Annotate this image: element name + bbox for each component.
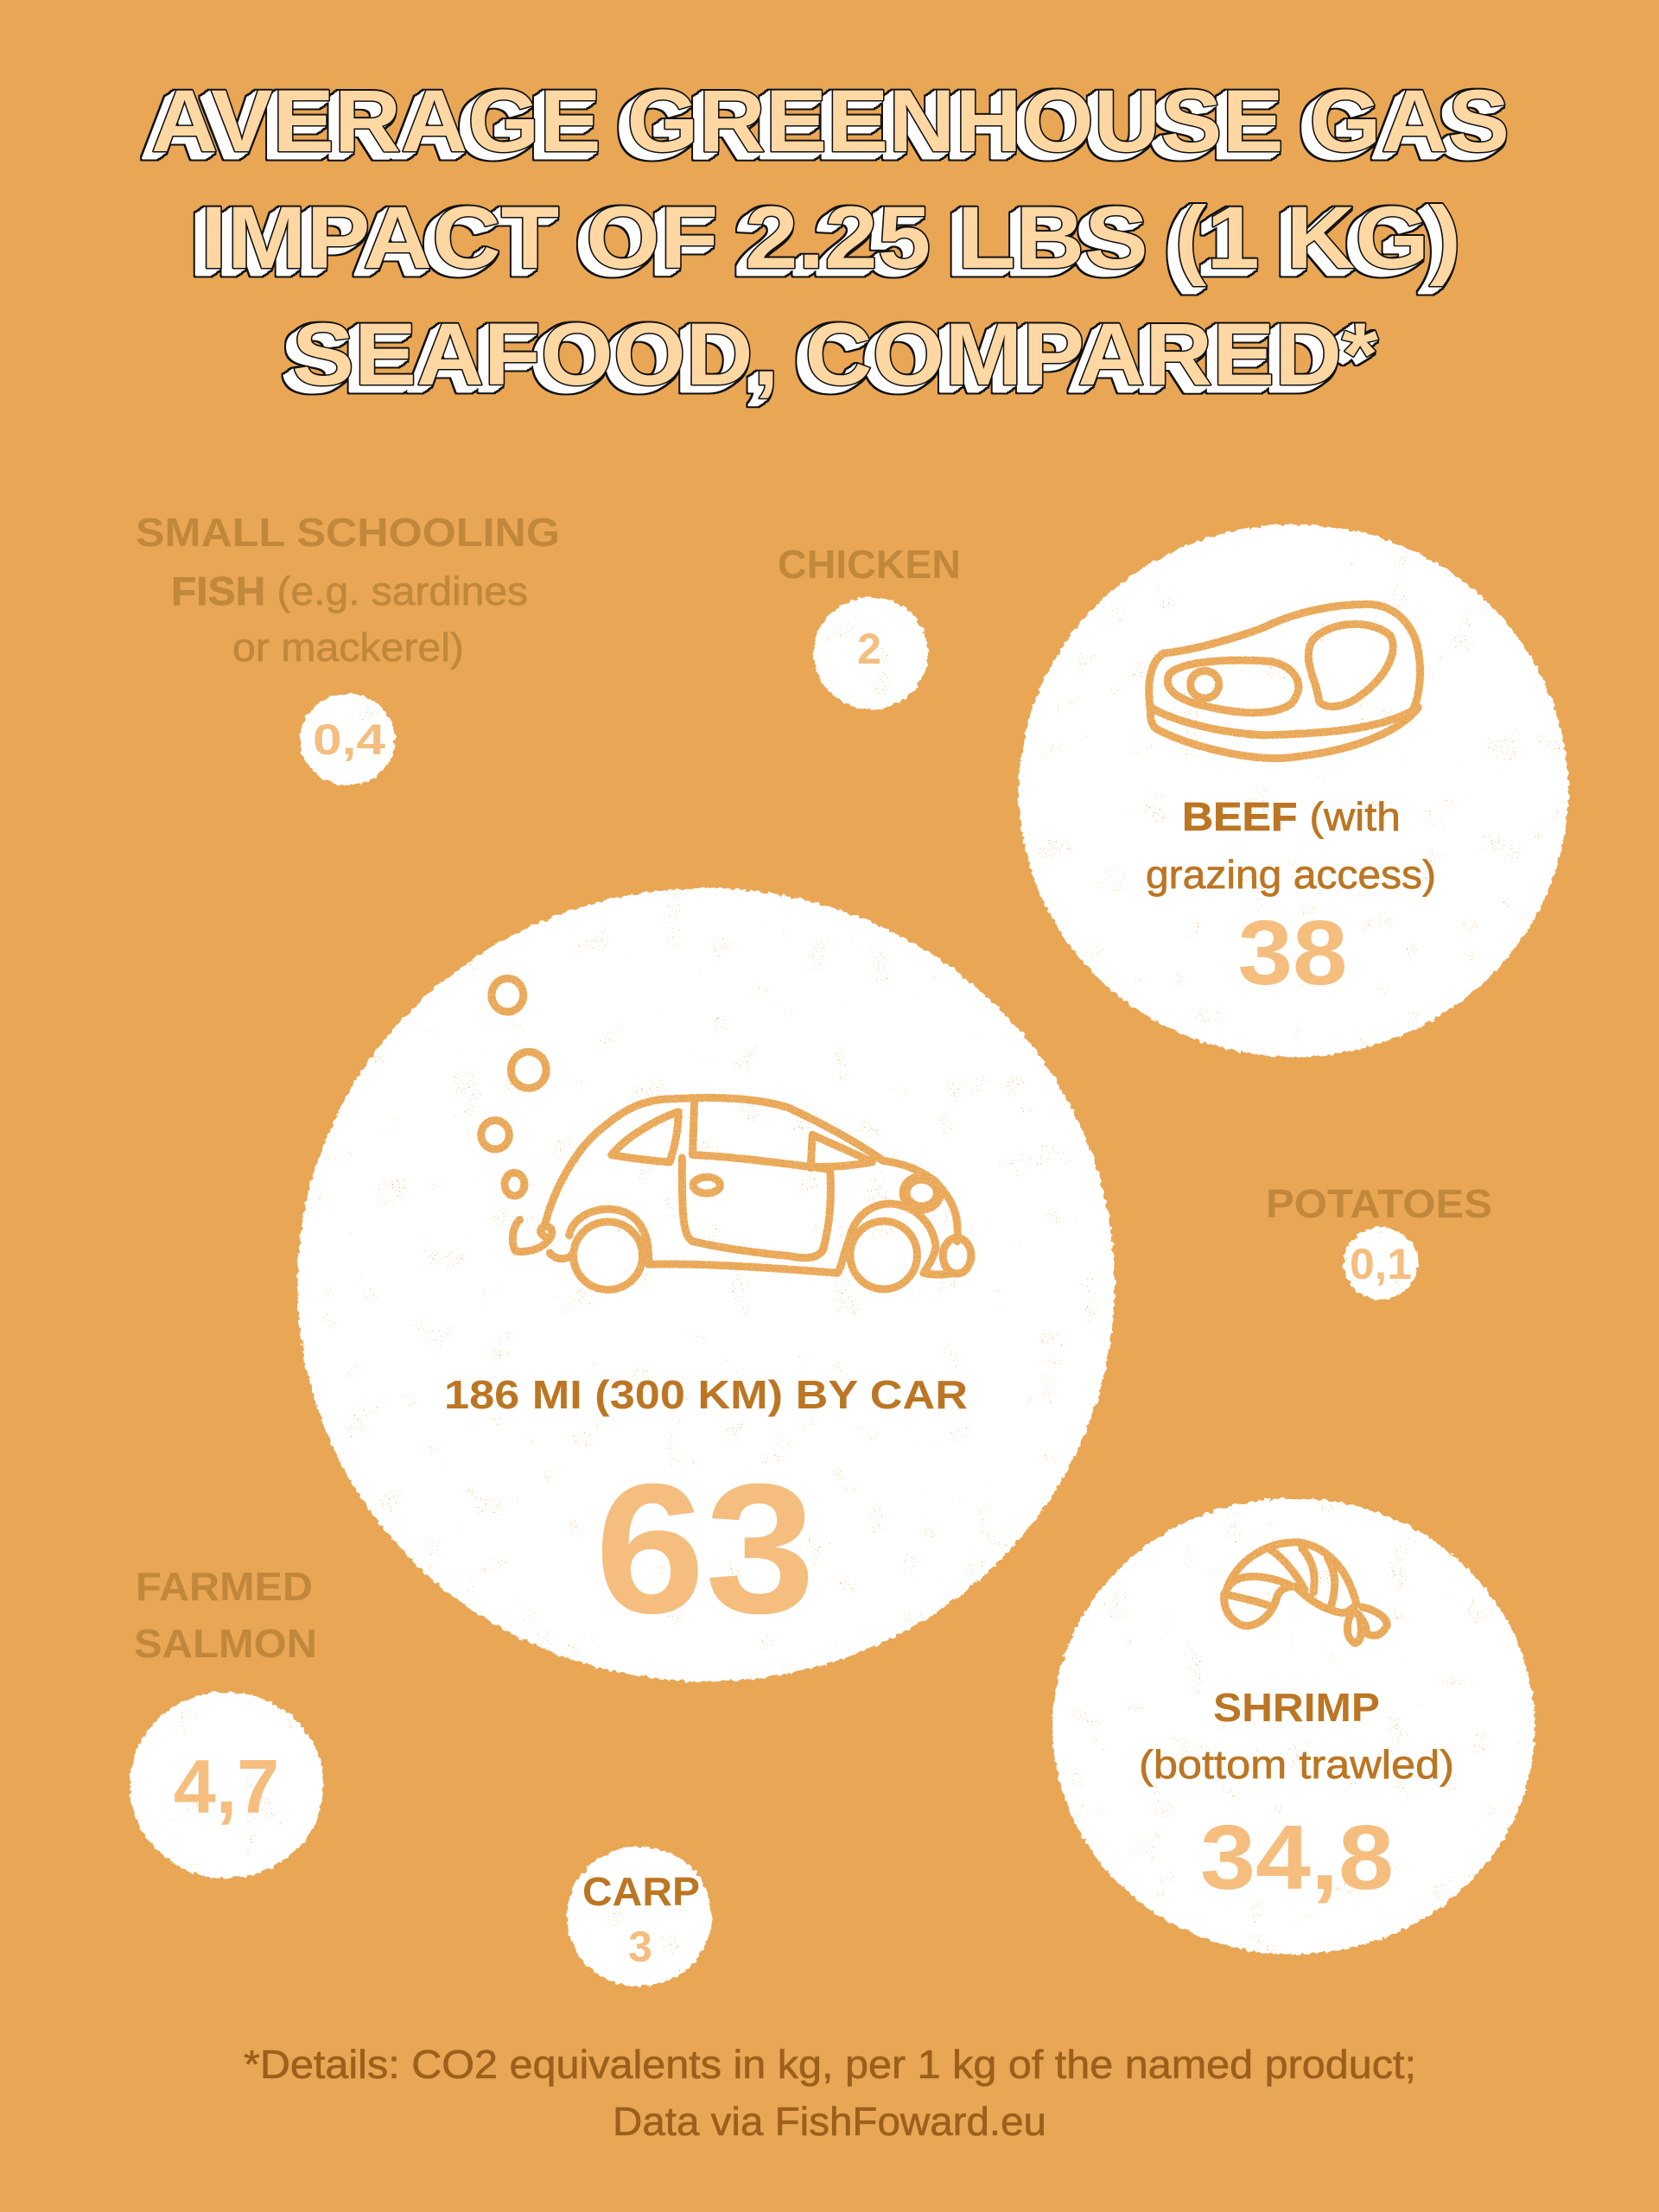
title: IMPACT OF 2.25 LBS (1 KG) (200, 188, 1461, 287)
circle: chicken (814, 597, 928, 709)
circle: car (297, 888, 1115, 1681)
label: potatoes: POTATOES (1266, 1181, 1492, 1226)
label: small schooling fish (136, 510, 560, 670)
bubble: beef (1019, 524, 1568, 1057)
value: 0,4: 0,4 (313, 715, 385, 764)
label: farmed salmon: SALMON (134, 1621, 317, 1666)
circle: beef (1019, 524, 1568, 1057)
circle: carp (567, 1847, 712, 1986)
value: 63: 63 (594, 1446, 816, 1652)
label: beef: BEEF (with (1182, 794, 1401, 839)
bubble: shrimp (1052, 1498, 1535, 1955)
title: SEAFOOD, COMPARED* (292, 305, 1378, 404)
label: carp: CARP (582, 1869, 700, 1914)
title: AVERAGE GREENHOUSE GAS (151, 72, 1510, 170)
value: 2: 2 (857, 625, 881, 673)
value: 0,1: 0,1 (1350, 1240, 1412, 1288)
value: 38: 38 (1237, 902, 1348, 1004)
label: beef (1146, 794, 1436, 897)
bubble: chicken (778, 542, 961, 709)
label: beef: grazing access) (1146, 852, 1436, 897)
bubble: small schooling fish (136, 510, 560, 785)
label: chicken: CHICKEN (778, 542, 961, 587)
value: 4,7: 4,7 (174, 1744, 279, 1829)
value: 3: 3 (628, 1923, 652, 1971)
label: farmed salmon: FARMED (136, 1564, 313, 1609)
footnote: Data via FishFoward.eu (613, 2099, 1046, 2144)
circle: shrimp (1052, 1498, 1535, 1955)
label: shrimp: (bottom trawled) (1139, 1742, 1454, 1787)
icon: car with exhaust bubbles (481, 978, 971, 1290)
icon: shrimp (1224, 1542, 1387, 1643)
label: car distance: 186 MI (300 KM) BY CAR (444, 1372, 968, 1417)
footnote (244, 2042, 1416, 2144)
label: farmed salmon (134, 1564, 317, 1666)
label: small schooling fish: FISH (e.g. sardines (171, 569, 528, 613)
circle: potatoes (1344, 1227, 1418, 1300)
bubble: carp (567, 1847, 712, 1986)
footnote: *Details: CO2 equivalents in kg, per 1 kg of the named product; (244, 2042, 1416, 2087)
label: small schooling fish: or mackerel) (232, 625, 464, 670)
circle: farmed salmon (130, 1692, 323, 1878)
value: 34,8: 34,8 (1200, 1807, 1394, 1909)
label: small schooling fish: SMALL SCHOOLING (136, 510, 560, 555)
title (151, 72, 1510, 404)
bubble: potatoes (1266, 1181, 1492, 1300)
label: shrimp: SHRIMP (1213, 1685, 1380, 1730)
bubble: car (297, 888, 1115, 1681)
icon: steak (1149, 604, 1421, 759)
label: shrimp (1139, 1685, 1454, 1787)
circle: small schooling fish (300, 694, 395, 785)
bubble: farmed salmon (130, 1564, 323, 1878)
